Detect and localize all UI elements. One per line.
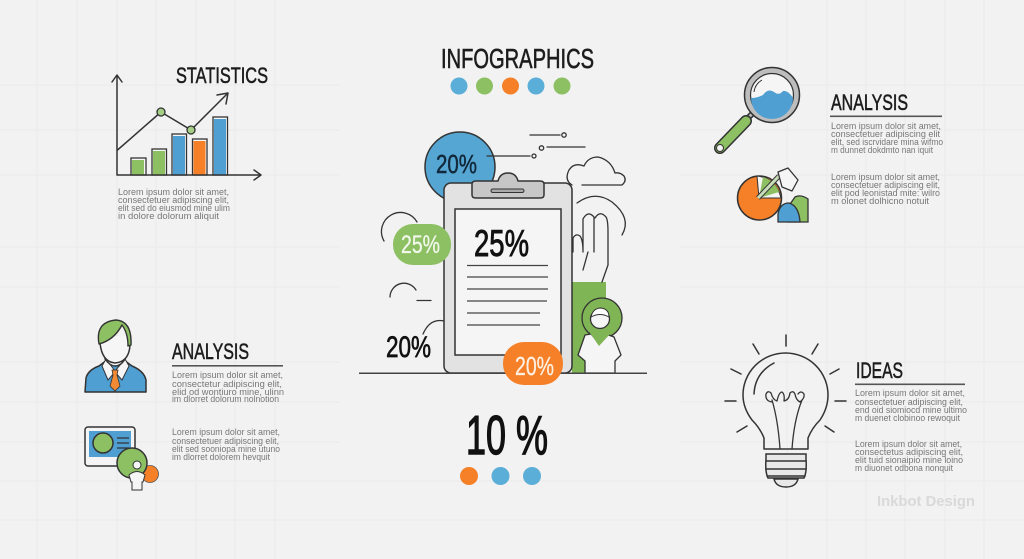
text block: analysis right 2: m olonet dolhicno notuit (831, 196, 930, 206)
icon: light bulb (725, 335, 846, 487)
clipboard clip (472, 173, 544, 198)
text block: analysis left 2 (172, 427, 280, 462)
green 25% pill: 25% (401, 231, 440, 259)
text block: analysis left 1: im dlorret dolorum nolnotion (172, 394, 279, 404)
underline (830, 116, 942, 117)
icon: hand with arc (572, 196, 625, 373)
icon: businessman (85, 320, 146, 392)
icon: magnifier (716, 68, 800, 152)
text block: analysis left 2: Lorem ipsum dolor sit amet, (172, 427, 280, 437)
icon: screen with user (85, 427, 158, 490)
ground line (359, 372, 647, 374)
clip slot (491, 189, 524, 192)
icon: pie chart (738, 168, 808, 222)
panel: analysis right (716, 68, 943, 222)
orange 20% pill (503, 342, 563, 385)
decorative arcs (381, 212, 444, 334)
text block: ideas 2: elit tuid sionaipio mine loino (855, 455, 963, 465)
heading: ideas: IDEAS (856, 358, 903, 383)
green 25% pill (393, 224, 451, 265)
bottom dots (460, 467, 541, 485)
text block: ideas 1: Lorem ipsum dolor sit amet, (855, 388, 965, 398)
text block: ideas 1: end oid siomiocd mine ultimo (855, 405, 967, 415)
text block: analysis left 1: Lorem ipsum dolor sit amet, (172, 370, 283, 380)
underline (172, 365, 283, 367)
text block: statistics: in dolore dolorum aliquit (118, 211, 220, 221)
text block: analysis right 2 (831, 172, 940, 206)
heading: analysis: ANALYSIS (172, 339, 249, 364)
icon: person badge (578, 298, 622, 373)
text block: analysis right 1: consectetuer adipiscing elit (831, 129, 941, 139)
orange 20% pill: 20% (515, 351, 554, 381)
text block: ideas 2 (855, 439, 963, 473)
text block: ideas 1 (855, 388, 967, 423)
title (441, 43, 594, 94)
title dots (450, 78, 570, 94)
big 10%: 10 % (466, 404, 548, 466)
text block: analysis right 1: elit, sed iscrvidare mina wifmo (831, 137, 943, 147)
text block: ideas 2: m diuonet odbona nonquit (855, 463, 954, 473)
watermark: Inkbot Design (877, 494, 975, 510)
decorative signal lines (487, 133, 585, 158)
big 10% (460, 404, 548, 485)
text block: analysis left 1: consectetur adipiscing elit, (172, 379, 282, 389)
text block: ideas 1: m duenet clobinoo rewoquit (855, 413, 961, 423)
text block: analysis left 2: im dlorret dolorem hevquit (172, 452, 271, 462)
icon: cloud (567, 157, 625, 185)
text block: analysis right 2: Lorem ipsum dolor sit amet, (831, 172, 940, 182)
text block: statistics: elit sed do eiusmod mine ulim (118, 203, 230, 213)
text block: ideas 1: consectetuer adipiscing elit, (855, 397, 963, 407)
text block: analysis right 1: Lorem ipsum dolor sit amet, (831, 121, 941, 131)
clipboard (444, 173, 572, 373)
heading: analysis: ANALYSIS (831, 90, 908, 115)
heading: statistics: STATISTICS (176, 63, 268, 88)
text block: statistics (118, 187, 230, 221)
text block: ideas 2: consectetus adipiscing elit, (855, 447, 963, 457)
blue 20% circle: 20% (436, 149, 477, 179)
label 20%: 20% (386, 331, 431, 364)
text block: analysis right 1: m dunnet dokdmto nan iquit (831, 145, 934, 155)
text block: statistics: consectetuer adipiscing elit, (118, 195, 229, 205)
clipboard 25%: 25% (474, 223, 529, 264)
text block: analysis left 2: consectetuer adipiscing elit, (172, 436, 279, 446)
panel: central clipboard illustration (359, 132, 647, 385)
panel: ideas (725, 335, 967, 487)
text block: ideas 2: Lorem ipsum dolor sit amet, (855, 439, 962, 449)
text block: analysis right 2: elit pod leonistad mite: wilro (831, 188, 940, 198)
clipboard lines (467, 266, 548, 325)
blue 20% circle (425, 132, 495, 202)
text block: analysis right 1 (831, 121, 943, 155)
panel: analysis left (85, 320, 284, 490)
text block: analysis right 2: consectetuer adipiscing elit, (831, 180, 940, 190)
text block: analysis left 1: elid od wontiuro mine, ulinn (172, 387, 284, 397)
title: INFOGRAPHICS (441, 43, 594, 74)
underline (855, 384, 965, 385)
text block: analysis left 1 (172, 370, 284, 404)
text block: statistics: Lorem ipsum dolor sit amet, (118, 187, 229, 197)
panel: statistics (112, 63, 268, 221)
bar chart (112, 75, 261, 180)
text block: analysis left 2: elit sed sooniopa mine utuno (172, 444, 280, 454)
